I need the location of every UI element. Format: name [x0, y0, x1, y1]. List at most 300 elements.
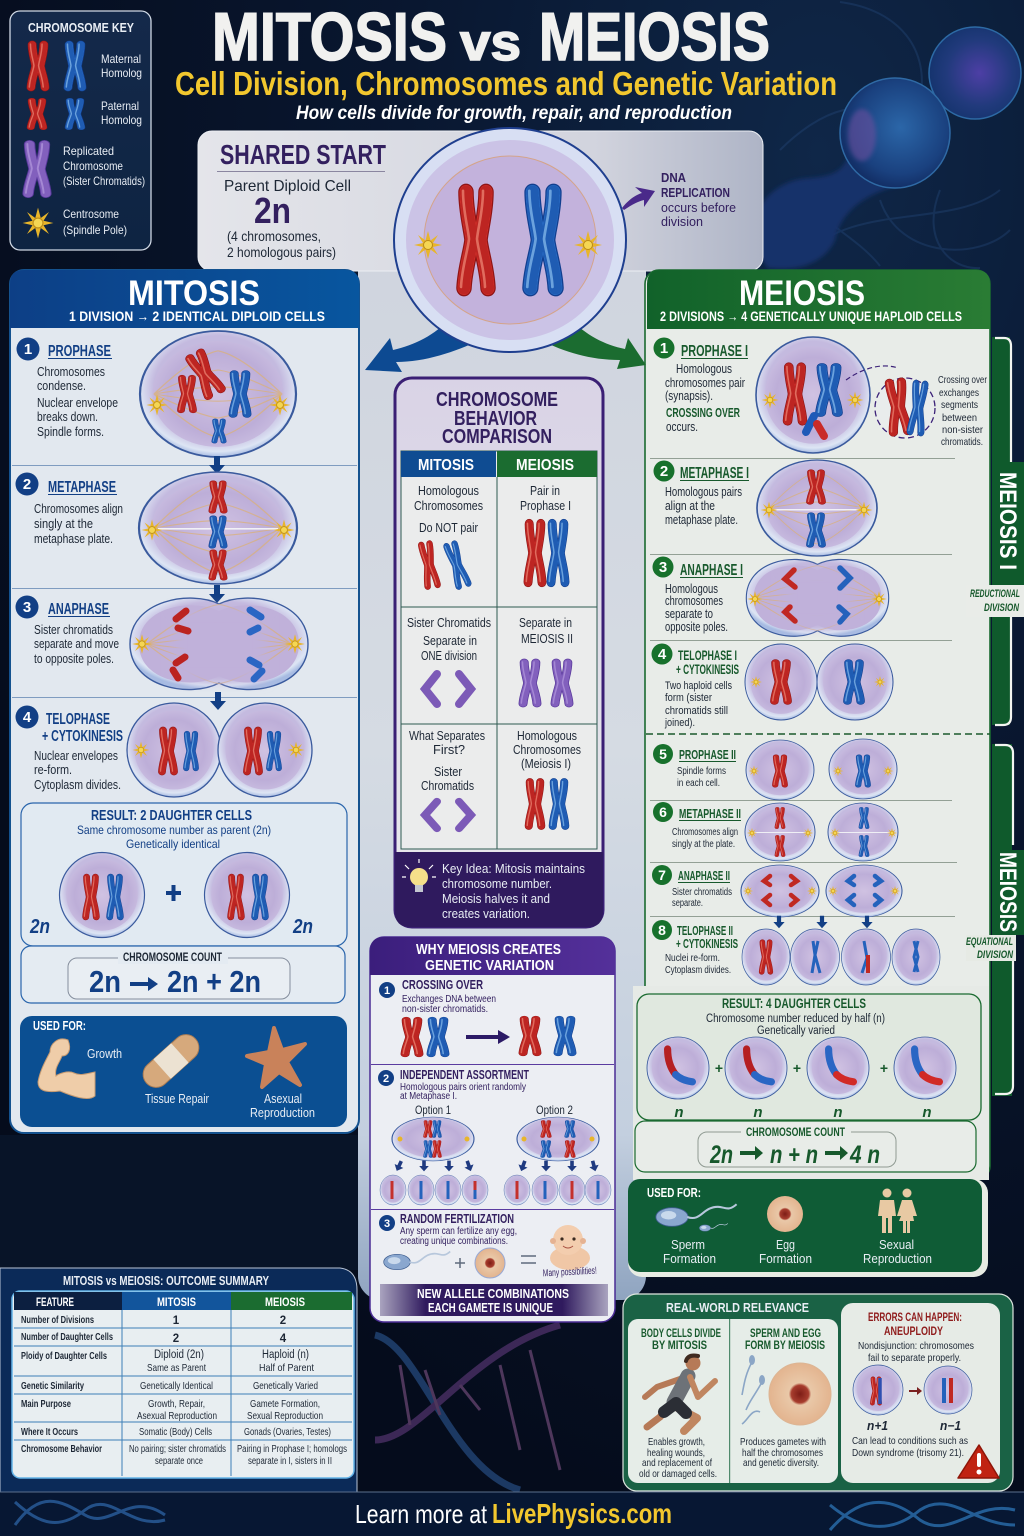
row: genetic similarity: Genetically Varied: [253, 1380, 318, 1392]
step 2 metaphase text: Chromosomes align: [34, 501, 123, 516]
result: 4 daughter cells: n: [753, 1104, 763, 1121]
banner: new allele combinations: NEW ALLELE COMBINATIONS: [417, 1286, 569, 1301]
step 7 anaphase II: [652, 865, 902, 917]
chromosome count: 2n: [89, 964, 121, 999]
key: maternal homolog: Maternal: [101, 52, 141, 66]
row: ploidy: Half of Parent: [259, 1362, 314, 1374]
section 1: crossing over: [379, 978, 572, 1054]
step 2 metaphase I text: align at the: [665, 499, 715, 513]
key: maternal homolog: [29, 44, 142, 88]
step 1 prophase I text: CROSSING OVER: [666, 406, 740, 420]
row: what separates first: First?: [433, 742, 465, 757]
step 4 telophase text: re-form.: [34, 762, 72, 777]
icon: sperm: [656, 1204, 737, 1231]
sperm and egg text: FORM BY MEIOSIS: [745, 1340, 825, 1352]
crossing over detail: chromatids.: [941, 436, 983, 448]
meiosis header: [647, 270, 990, 329]
card: errors: Nondisjunction: chromosomes: [858, 1340, 974, 1352]
row: chromosome behavior: Pairing in Prophase I; homologs: [237, 1444, 347, 1455]
arrow: to meiosis: [540, 318, 646, 369]
metaphase cell: [139, 472, 297, 584]
used for: mitosis: Asexual: [264, 1092, 302, 1106]
step 1 prophase I text: [654, 338, 748, 434]
body cells text: BY MITOSIS: [652, 1340, 707, 1352]
key idea: Key Idea: Mitosis maintains: [442, 861, 585, 876]
section 3: random fertilization: creating unique combinations.: [400, 1236, 508, 1247]
step 8 telophase II: Nuclei re-form.: [665, 953, 720, 964]
row: number of daughter cells: 4: [280, 1333, 287, 1345]
label: equational division: [966, 935, 1016, 961]
step 2 metaphase I text: Homologous pairs: [665, 485, 742, 499]
step 3 anaphase text: 3: [23, 599, 31, 616]
step 8 telophase II: Cytoplasm divides.: [665, 965, 731, 976]
section 2: independent assortment: Option 2: [536, 1103, 573, 1117]
step 3 anaphase I text: chromosomes: [665, 594, 723, 608]
tagline: How cells divide for growth, repair, and reproduction: [296, 103, 732, 124]
row: homologous chromosomes: Do NOT pair: [419, 520, 479, 535]
panel: real-world relevance: REAL-WORLD RELEVANCE: [666, 1301, 809, 1315]
step 6 metaphase II: Chromosomes align: [672, 827, 738, 838]
row: chromosome behavior: [21, 1444, 347, 1467]
used for: meiosis: USED FOR:: [647, 1186, 701, 1200]
step 3 anaphase I text: 3: [659, 559, 667, 576]
key idea: [395, 852, 603, 927]
row: sister chromatids: MEIOSIS II: [521, 631, 573, 646]
step 5 prophase II: Spindle forms: [677, 765, 726, 777]
used for: meiosis: [628, 1179, 988, 1277]
bracket: meiosis II: [992, 744, 1024, 1096]
crossing over detail: exchanges: [939, 387, 979, 399]
row: what separates first: Homologous: [517, 728, 577, 743]
icon: baby: [550, 1225, 590, 1270]
icon: light bulb: [402, 859, 436, 892]
step 3 anaphase text: [16, 596, 119, 666]
step 5 prophase II: 5: [659, 746, 667, 762]
used for: mitosis: Tissue Repair: [145, 1092, 209, 1106]
row: ploidy: [21, 1349, 314, 1374]
crossing over detail: segments: [941, 399, 978, 411]
result: 4 daughter cells: RESULT: 4 DAUGHTER CELLS: [722, 996, 866, 1011]
body cells text: BODY CELLS DIVIDE: [641, 1328, 721, 1340]
step 8 telophase II: 8: [658, 922, 666, 938]
step 3 anaphase I text: Homologous: [665, 582, 718, 596]
step 1 prophase I text: chromosomes pair: [665, 376, 745, 390]
row: homologous chromosomes: [414, 483, 571, 587]
step 1 prophase text: breaks down.: [37, 409, 98, 424]
why header: [370, 937, 615, 975]
panel: why meiosis creates genetic variation: [370, 937, 615, 1322]
arrow: [209, 585, 225, 603]
result: 4 daughter cells: +: [715, 1060, 723, 1076]
step 1 prophase text: [16, 338, 118, 439]
center backdrop: [358, 200, 646, 1300]
step 4 telophase I text: chromatids still: [665, 705, 728, 717]
panel: shared start: [198, 131, 763, 271]
DNA replication note: [661, 170, 736, 229]
step 3 anaphase I text: [652, 556, 743, 634]
panel: real-world relevance: [623, 1294, 1013, 1491]
telophase cells: [127, 703, 312, 797]
step 5 prophase II: PROPHASE II: [679, 747, 736, 762]
summary table: MEIOSIS: [265, 1297, 305, 1309]
row: what separates first: (Meiosis I): [521, 756, 571, 771]
card: errors: Down syndrome (trisomy 21).: [852, 1447, 964, 1459]
key idea: Meiosis halves it and: [442, 891, 550, 906]
section 2: independent assortment: [378, 1068, 611, 1205]
section 2: independent assortment: INDEPENDENT ASSORTMENT: [400, 1068, 529, 1082]
key: replicated chromosome: [26, 144, 145, 194]
row: homologous chromosomes: Chromosomes: [414, 498, 483, 513]
row: main purpose: Sexual Reproduction: [247, 1410, 323, 1422]
row: what separates first: What Separates: [409, 728, 485, 743]
used for: meiosis: Formation: [663, 1251, 716, 1266]
row: homologous chromosomes: Prophase I: [520, 498, 571, 513]
chromosome count: meiosis: [635, 1121, 976, 1172]
step 6 metaphase II: METAPHASE II: [679, 806, 741, 821]
section 2: independent assortment: Option 1: [415, 1103, 451, 1117]
result: 4 daughter cells: +: [793, 1060, 801, 1076]
step 8 telophase II: [652, 920, 940, 985]
row: number of daughter cells: Number of Daughter Cells: [21, 1332, 113, 1343]
title: [212, 0, 770, 75]
row: where it occurs: Gonads (Ovaries, Testes): [244, 1426, 331, 1438]
step 2 metaphase text: [16, 472, 123, 546]
banner: new allele combinations: EACH GAMETE IS UNIQUE: [428, 1300, 553, 1315]
parent diploid text: (4 chromosomes,: [227, 228, 321, 244]
arrow: [209, 456, 225, 474]
key: paternal homolog: [29, 99, 142, 128]
step 4 telophase I text: + CYTOKINESIS: [676, 661, 739, 677]
step 4 telophase text: TELOPHASE: [46, 711, 110, 728]
step 1 prophase I text: (synapsis).: [665, 389, 713, 403]
step 4 telophase I text: TELOPHASE I: [678, 647, 737, 663]
step 6 metaphase II: singly at the plate.: [672, 839, 735, 850]
step 4 telophase text: + CYTOKINESIS: [42, 728, 123, 745]
icon: runner: [645, 1356, 715, 1431]
bracket: meiosis I: MEIOSIS I: [994, 472, 1021, 570]
footer text: LivePhysics.com: [492, 1498, 672, 1529]
heading: shared start: SHARED START: [220, 139, 386, 170]
parent diploid cell: [394, 128, 626, 352]
step 1 prophase I text: 1: [660, 340, 668, 357]
row: chromosome behavior: separate in I, sisters in II: [248, 1456, 332, 1467]
icon: starfish: [247, 1028, 305, 1087]
row: homologous chromosomes: Pair in: [530, 483, 560, 498]
panel: meiosis: [633, 270, 990, 1180]
body cells text: [641, 1328, 721, 1352]
section 3: random fertilization: [379, 1212, 597, 1279]
step 1 prophase text: Nuclear envelope: [37, 395, 118, 410]
row: homologous chromosomes: Homologous: [418, 483, 479, 498]
key: maternal homolog: Homolog: [101, 66, 142, 80]
row: number of divisions: 1: [173, 1315, 180, 1327]
step 4 telophase I text: [652, 644, 739, 729]
subtitle: Cell Division, Chromosomes and Genetic Variation: [175, 65, 837, 102]
icon: sperm and egg: [742, 1355, 831, 1425]
row: chromosome behavior: Chromosome Behavior: [21, 1444, 102, 1455]
step 1 prophase text: PROPHASE: [48, 343, 111, 360]
row: main purpose: Main Purpose: [21, 1399, 71, 1410]
row: chromosome behavior: No pairing; sister chromatids: [129, 1444, 226, 1455]
card: errors: fail to separate properly.: [868, 1352, 961, 1364]
mitosis header: [10, 270, 359, 328]
mitosis header: 1 DIVISION → 2 IDENTICAL DIPLOID CELLS: [69, 308, 325, 324]
step 3 anaphase I text: opposite poles.: [665, 620, 728, 634]
aneuploidy cells: n+1: [867, 1419, 888, 1433]
DNA replication note: REPLICATION: [661, 185, 730, 200]
title: MEIOSIS: [539, 0, 770, 75]
row: what separates first: Chromatids: [421, 778, 474, 793]
footer text: [355, 1498, 672, 1529]
step 4 telophase I text: Two haploid cells: [665, 680, 732, 692]
step 2 metaphase text: 2: [23, 476, 31, 493]
row: sister chromatids: Sister Chromatids: [407, 615, 491, 630]
body cells description: Enables growth,: [648, 1436, 705, 1448]
step 5 prophase II: [653, 739, 897, 800]
parent diploid text: [224, 178, 351, 260]
arrow: [210, 692, 226, 710]
step 1 prophase I text: PROPHASE I: [681, 343, 748, 360]
result: 2 daughter cells: 2n: [29, 916, 50, 938]
step 6 metaphase II: 6: [659, 804, 667, 820]
chromosome count: CHROMOSOME COUNT: [123, 952, 222, 964]
body cells description: healing wounds,: [647, 1447, 705, 1459]
row: ploidy: Ploidy of Daughter Cells: [21, 1351, 107, 1362]
step 1 prophase text: Spindle forms.: [37, 424, 104, 439]
background DNA center: [375, 1325, 560, 1490]
label: reductional division: [966, 585, 1024, 617]
step 4 telophase text: [16, 706, 123, 792]
step 3 anaphase text: ANAPHASE: [48, 601, 109, 618]
crossing over detail: [846, 366, 987, 448]
step 6 metaphase II: [653, 802, 898, 861]
comparison heading: CHROMOSOME: [436, 389, 558, 411]
step 2 metaphase text: METAPHASE: [48, 479, 116, 496]
key: paternal homolog: Homolog: [101, 113, 142, 127]
result: 4 daughter cells: n: [674, 1104, 684, 1121]
result: 2 daughter cells: 2n: [292, 916, 313, 938]
sperm and egg description: Produces gametes with: [740, 1436, 826, 1448]
chromosome key: CHROMOSOME KEY: [28, 21, 135, 35]
step 4 telophase text: Cytoplasm divides.: [34, 777, 121, 792]
footer: [0, 1492, 1024, 1536]
row: where it occurs: Somatic (Body) Cells: [139, 1426, 212, 1438]
row: number of divisions: [21, 1315, 286, 1327]
icon: egg: [767, 1196, 803, 1232]
row: what separates first: Chromosomes: [513, 742, 581, 757]
row: ploidy: Same as Parent: [147, 1362, 206, 1374]
arrow: to mitosis: [365, 318, 480, 372]
section 1: crossing over: Exchanges DNA between: [402, 993, 496, 1005]
row: genetic similarity: Genetic Similarity: [21, 1381, 84, 1392]
prophase I cell: [756, 337, 870, 453]
result: 4 daughter cells: +: [880, 1060, 888, 1076]
step 2 metaphase I text: metaphase plate.: [665, 513, 738, 527]
comparison heading: BEHAVIOR: [454, 408, 537, 430]
label: equational division: DIVISION: [977, 949, 1014, 961]
key: replicated chromosome: Replicated: [63, 144, 114, 158]
section 1: crossing over: 1: [384, 985, 390, 997]
row: main purpose: Gamete Formation,: [250, 1398, 320, 1410]
step 3 anaphase text: separate and move: [34, 636, 119, 651]
row: ploidy: Haploid (n): [262, 1349, 309, 1361]
step 4 telophase I text: form (sister: [665, 692, 712, 704]
footer text: Learn more at: [355, 1499, 488, 1529]
result: 4 daughter cells: n: [833, 1104, 843, 1121]
row: what separates first: [409, 728, 581, 828]
outcome summary: [0, 1268, 357, 1492]
chromosome count: meiosis: 2n: [709, 1141, 733, 1169]
DNA replication note: division: [661, 214, 703, 229]
row: ploidy: Diploid (2n): [154, 1349, 204, 1361]
step 3 anaphase text: Sister chromatids: [34, 622, 113, 637]
used for: meiosis: Sperm: [671, 1237, 705, 1252]
step 1 prophase I text: Homologous: [676, 362, 732, 376]
summary table: MITOSIS: [157, 1297, 196, 1309]
card: errors: ERRORS CAN HAPPEN:: [868, 1312, 962, 1324]
key: centrosome: [23, 207, 127, 238]
step 2 metaphase text: singly at the: [34, 516, 93, 531]
chromosome count: meiosis: n + n: [770, 1141, 818, 1169]
row: what separates first: Sister: [434, 764, 463, 779]
step 1 prophase text: condense.: [37, 378, 86, 393]
banner: new allele combinations: [380, 1284, 608, 1316]
row: genetic similarity: [21, 1380, 318, 1392]
row: chromosome behavior: separate once: [155, 1456, 203, 1467]
key: centrosome: Centrosome: [63, 207, 119, 221]
key: replicated chromosome: (Sister Chromatids): [63, 174, 145, 188]
used for: mitosis: Growth: [87, 1047, 122, 1061]
body cells description: old or damaged cells.: [639, 1468, 717, 1480]
result: 4 daughter cells: n: [922, 1104, 932, 1121]
body cells description: and replacement of: [642, 1457, 712, 1469]
comparison heading: COMPARISON: [442, 426, 552, 448]
row: sister chromatids: ONE division: [421, 648, 477, 663]
parent diploid text: Parent Diploid Cell: [224, 178, 351, 195]
row: where it occurs: [21, 1426, 331, 1438]
crossing over detail: Crossing over: [938, 374, 987, 386]
parent diploid text: 2n: [254, 190, 291, 231]
step 5 prophase II: in each cell.: [677, 777, 720, 789]
why header: WHY MEIOSIS CREATES: [416, 942, 561, 958]
sperm and egg text: SPERM AND EGG: [750, 1328, 821, 1340]
parent diploid text: 2 homologous pairs): [227, 244, 336, 260]
section 3: random fertilization: Any sperm can fertilize any egg,: [400, 1226, 517, 1237]
row: number of daughter cells: 2: [173, 1333, 179, 1345]
section 3: random fertilization: Many possibilities!: [543, 1266, 597, 1279]
step 3 anaphase I text: ANAPHASE I: [680, 562, 743, 579]
arrow: DNA replication: [622, 187, 655, 210]
used for: mitosis: USED FOR:: [33, 1019, 86, 1033]
row: sister chromatids: Separate in: [423, 633, 477, 648]
used for: meiosis: Egg: [776, 1237, 795, 1252]
anaphase cell: [130, 598, 308, 690]
summary table: FEATURE: [36, 1297, 74, 1309]
result: 2 daughter cells: [21, 803, 347, 946]
result: 4 daughter cells: [637, 994, 981, 1121]
step 7 anaphase II: Sister chromatids: [672, 887, 732, 898]
metaphase I cell: [757, 460, 877, 556]
body cells description: [639, 1436, 717, 1480]
centrosomes: [414, 231, 602, 259]
card: body cells and gametes: [628, 1319, 838, 1483]
comparison heading: [436, 389, 558, 448]
step 2 metaphase I text: [654, 460, 749, 527]
sperm and egg description: [740, 1436, 826, 1469]
step 7 anaphase II: ANAPHASE II: [678, 868, 730, 883]
crossing over detail: between: [942, 412, 977, 424]
step 3 anaphase text: to opposite poles.: [34, 651, 114, 666]
step 1 prophase text: 1: [24, 341, 32, 358]
sperm and egg text: [745, 1328, 825, 1352]
step 7 anaphase II: separate.: [672, 898, 703, 909]
row: genetic similarity: Genetically Identical: [140, 1380, 213, 1392]
red chromosome: [461, 191, 488, 288]
title: vs: [460, 14, 521, 72]
used for: mitosis: Reproduction: [250, 1106, 315, 1120]
step 4 telophase text: 4: [23, 709, 32, 726]
step 1 prophase I text: occurs.: [666, 420, 698, 434]
blue chromosome: [527, 191, 556, 288]
step 1 prophase text: Chromosomes: [37, 364, 105, 379]
panel: mitosis: [10, 270, 359, 1133]
row: where it occurs: Where It Occurs: [21, 1427, 78, 1438]
result: 2 daughter cells: Genetically identical: [126, 837, 220, 851]
panel: chromosome behavior comparison: [395, 378, 603, 927]
icon: arm: [38, 1039, 95, 1099]
result: 2 daughter cells: Same chromosome number as parent (2n): [77, 823, 271, 837]
used for: meiosis: Reproduction: [863, 1251, 932, 1266]
DNA replication note: occurs before: [661, 200, 736, 215]
used for: mitosis: [20, 1016, 347, 1127]
crossing over detail: non-sister: [942, 424, 983, 436]
step 7 anaphase II: 7: [658, 867, 666, 883]
summary table: [12, 1291, 354, 1478]
chromosome count: [21, 946, 345, 1003]
row: number of divisions: Number of Divisions: [21, 1315, 94, 1326]
key idea: creates variation.: [442, 906, 530, 921]
step 2 metaphase text: metaphase plate.: [34, 531, 113, 546]
card: errors: ANEUPLOIDY: [884, 1324, 943, 1338]
sperm and egg description: half the chromosomes: [742, 1447, 823, 1459]
meiosis header: MEIOSIS: [739, 274, 865, 313]
section 2: independent assortment: at Metaphase I.: [400, 1091, 457, 1102]
DNA replication note: DNA: [661, 170, 687, 185]
icon: bandage: [138, 1029, 204, 1093]
step 8 telophase II: TELOPHASE II: [677, 923, 733, 938]
result: 4 daughter cells: Genetically varied: [757, 1025, 835, 1037]
step 8 telophase II: + CYTOKINESIS: [676, 936, 738, 951]
key idea: chromosome number.: [442, 876, 552, 891]
row: sister chromatids: Separate in: [519, 615, 572, 630]
key: centrosome: (Spindle Pole): [63, 223, 127, 237]
step 2 metaphase I text: 2: [660, 463, 668, 480]
step 2 metaphase I text: METAPHASE I: [680, 465, 749, 482]
title: MITOSIS: [212, 0, 447, 75]
footer DNA right: [830, 1502, 1015, 1530]
bracket: meiosis I: [992, 337, 1024, 725]
used for: meiosis: Sexual: [879, 1237, 914, 1252]
comparison table: MITOSIS: [418, 457, 474, 474]
card: errors: Can lead to conditions such as: [852, 1435, 968, 1447]
result: 4 daughter cells: Chromosome number reduced by half (n): [706, 1013, 885, 1025]
icon: warning: [958, 1445, 999, 1478]
chromosome count: meiosis: 4 n: [849, 1141, 880, 1169]
section 2: independent assortment: Homologous pairs orient randomly: [400, 1082, 526, 1093]
prophase cell: [140, 331, 296, 457]
anaphase I cell: [746, 559, 889, 636]
card: errors: [841, 1303, 1000, 1483]
